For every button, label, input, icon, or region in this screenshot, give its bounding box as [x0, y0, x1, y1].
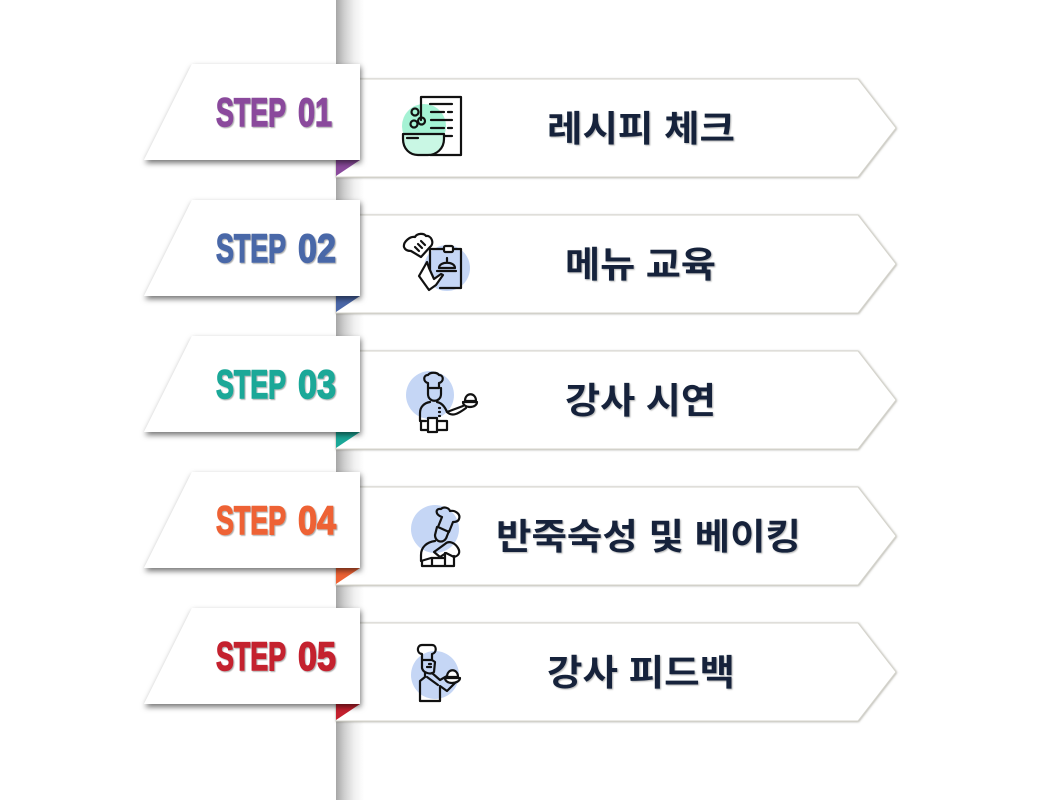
icon: recipe and bowl [402, 97, 461, 155]
step label 3: 03 [298, 363, 336, 407]
step label 1: 01 [298, 91, 332, 135]
step title 5: 강사 피드백 [547, 652, 735, 693]
fold triangle 3 [336, 432, 360, 448]
icon: chef hat and menu clipboard [404, 234, 470, 291]
panel: step 5 [144, 608, 896, 721]
vertical shadow strip [336, 0, 364, 800]
fold triangle 5 [336, 704, 360, 720]
panel: step 4 [144, 472, 896, 585]
step tab 2 [144, 200, 360, 296]
arrow banner 3 [336, 351, 896, 449]
step title 2: 메뉴 교육 [565, 244, 716, 285]
step tab 5 [144, 608, 360, 704]
step label 3: STEP [216, 363, 286, 407]
arrow banner 5 [336, 623, 896, 721]
icon: chef holding a dish [411, 645, 460, 701]
step title 4: 반죽숙성 및 베이킹 [496, 516, 801, 557]
step tab 1 [144, 64, 360, 160]
step label 4: STEP [216, 499, 286, 543]
fold triangle 1 [336, 160, 360, 176]
arrow banner 1 [336, 79, 896, 177]
step label 5: STEP [216, 635, 286, 679]
step label 2: 02 [298, 227, 336, 271]
arrow banner 4 [336, 487, 896, 585]
icon: chef kneading dough [411, 505, 459, 566]
fold triangle 4 [336, 568, 360, 584]
step tab 3 [144, 336, 360, 432]
step label 1: STEP [216, 91, 286, 135]
arrow banner 2 [336, 215, 896, 313]
step title 3: 강사 시연 [565, 380, 716, 421]
fold triangle 2 [336, 296, 360, 312]
step label 4: 04 [298, 499, 337, 543]
panel: step 3 [144, 336, 896, 449]
step label 5: 05 [298, 635, 336, 679]
step title 1: 레시피 체크 [547, 108, 735, 149]
panel: step 1 [144, 64, 896, 177]
step label 2: STEP [216, 227, 286, 271]
icon: chef presenting a dish [406, 371, 477, 432]
step tab 4 [144, 472, 360, 568]
panel: step 2 [144, 200, 896, 313]
